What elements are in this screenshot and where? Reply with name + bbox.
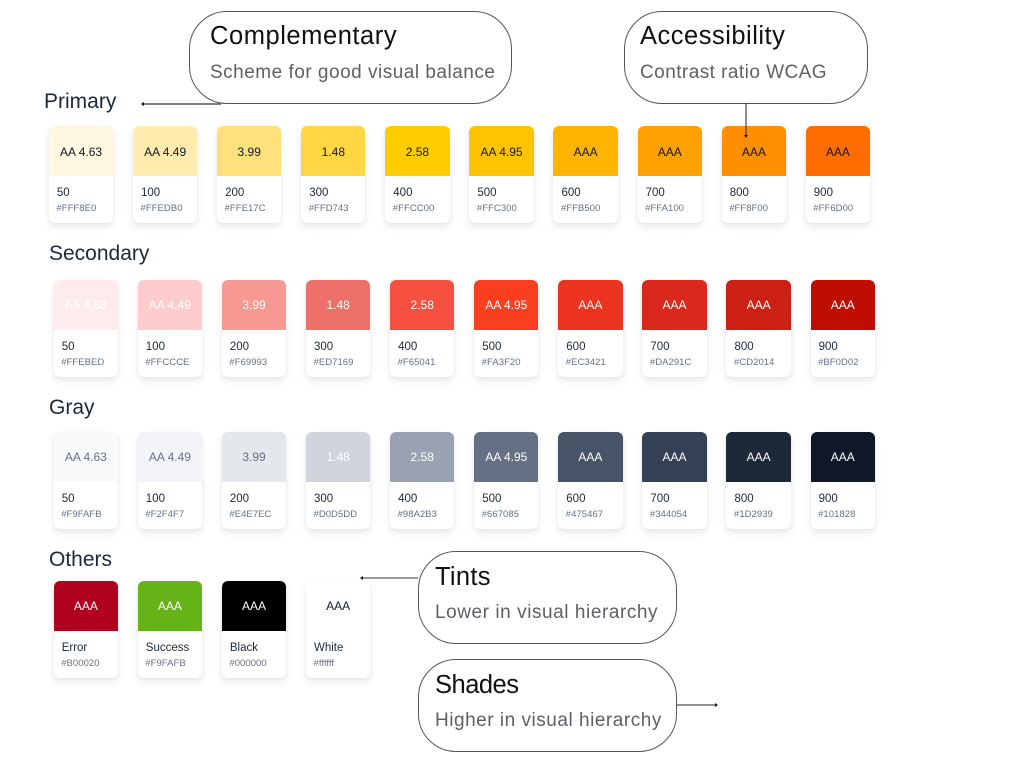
swatch: secondary 100: AA 4.49 bbox=[149, 298, 191, 312]
swatch: black: AAA bbox=[242, 599, 266, 613]
swatch: primary 700: #FFA100 bbox=[645, 203, 684, 214]
swatch: gray 400: 2.58 bbox=[411, 450, 434, 464]
heading: Others: Others bbox=[49, 548, 112, 571]
swatch: secondary 900: AAA bbox=[831, 298, 855, 312]
swatch: black: #000000 bbox=[229, 658, 267, 669]
swatch: primary 800: AAA bbox=[742, 145, 766, 159]
swatch: primary 400: 2.58 bbox=[406, 145, 429, 159]
swatch: white: #ffffff bbox=[313, 658, 334, 669]
swatch: secondary 800: AAA bbox=[747, 298, 771, 312]
swatch: white: White bbox=[314, 642, 343, 654]
callout: Tints bbox=[418, 551, 677, 644]
swatch: secondary 700 bbox=[642, 280, 707, 377]
swatch: secondary 300: 1.48 bbox=[326, 298, 350, 312]
swatch: secondary 400: #F65041 bbox=[398, 357, 435, 368]
callout: Complementary bbox=[189, 11, 512, 104]
swatch: secondary 200: 3.99 bbox=[242, 298, 266, 312]
swatch: secondary 800 bbox=[726, 280, 791, 377]
swatch: secondary 300: 300 bbox=[314, 341, 333, 353]
callout: Shades: Higher in visual hierarchy bbox=[435, 710, 662, 731]
swatch: secondary 400 bbox=[390, 280, 454, 377]
swatch: primary 600 bbox=[553, 126, 618, 223]
swatch: gray 200 bbox=[222, 432, 286, 529]
swatch: success bbox=[138, 581, 202, 678]
swatch: secondary 200: 200 bbox=[230, 341, 249, 353]
swatch: gray 200: #E4E7EC bbox=[229, 509, 271, 520]
swatch: gray 50: AA 4.63 bbox=[65, 450, 107, 464]
swatch: secondary 900: #BF0D02 bbox=[818, 357, 859, 368]
swatch: secondary 600: 600 bbox=[566, 341, 585, 353]
swatch: primary 700: AAA bbox=[658, 145, 682, 159]
swatch: primary 100 bbox=[133, 126, 197, 223]
callout: Complementary: Scheme for good visual balance bbox=[210, 62, 495, 83]
callout: Tints: Lower in visual hierarchy bbox=[435, 602, 658, 623]
swatch: secondary 50: AA 4.63 bbox=[65, 298, 107, 312]
swatch: gray 900: AAA bbox=[831, 450, 855, 464]
swatch: gray 300: 1.48 bbox=[326, 450, 350, 464]
swatch: gray 500: AA 4.95 bbox=[485, 450, 527, 464]
swatch: gray 800 bbox=[726, 432, 791, 529]
heading: Secondary: Secondary bbox=[49, 242, 149, 265]
swatch: gray 400 bbox=[390, 432, 454, 529]
swatch: primary 100: #FFEDB0 bbox=[140, 203, 183, 214]
swatch: primary 50: AA 4.63 bbox=[60, 145, 102, 159]
swatch: gray 400: #98A2B3 bbox=[398, 509, 437, 520]
swatch: secondary 500: 500 bbox=[482, 341, 501, 353]
panel: primary swatches bbox=[48, 126, 872, 228]
swatch: secondary 400: 400 bbox=[398, 341, 417, 353]
swatch: gray 50: #F9FAFB bbox=[61, 509, 102, 520]
swatch: gray 500: 500 bbox=[482, 493, 501, 505]
panel: other swatches bbox=[52, 581, 372, 683]
heading: Gray: Gray bbox=[49, 396, 95, 419]
swatch: gray 800: AAA bbox=[747, 450, 771, 464]
swatch: gray 800: #1D2939 bbox=[734, 509, 773, 520]
swatch: primary 200: 200 bbox=[225, 187, 244, 199]
swatch: primary 500: AA 4.95 bbox=[481, 145, 523, 159]
callout: Accessibility: Accessibility bbox=[640, 22, 785, 50]
swatch: gray 600: 600 bbox=[566, 493, 585, 505]
swatch: secondary 700: 700 bbox=[650, 341, 670, 353]
swatch: primary 300 bbox=[301, 126, 365, 223]
swatch: secondary 500: #FA3F20 bbox=[482, 357, 521, 368]
swatch: gray 700 bbox=[642, 432, 707, 529]
panel: gray swatches bbox=[52, 432, 876, 534]
swatch: gray 50 bbox=[54, 432, 118, 529]
callout: Shades: Shades bbox=[435, 671, 518, 699]
swatch: secondary 900 bbox=[811, 280, 875, 377]
swatch: primary 100: AA 4.49 bbox=[144, 145, 186, 159]
swatch: secondary 50: #FFEBED bbox=[61, 357, 104, 368]
swatch: gray 900: 900 bbox=[819, 493, 838, 505]
swatch: gray 900: #101828 bbox=[818, 509, 855, 520]
heading: Primary: Primary bbox=[44, 90, 116, 113]
callout: Shades bbox=[418, 659, 677, 752]
swatch: black: Black bbox=[230, 642, 258, 654]
callout: Complementary: Complementary bbox=[210, 22, 397, 50]
swatch: primary 900: #FF6D00 bbox=[813, 203, 853, 214]
swatch: white: AAA bbox=[326, 599, 350, 613]
swatch: gray 500 bbox=[474, 432, 538, 529]
swatch: white bbox=[306, 581, 370, 678]
arrow: Complementary to Primary bbox=[141, 102, 221, 106]
swatch: error bbox=[54, 581, 118, 678]
swatch: black bbox=[222, 581, 286, 678]
swatch: primary 300: 1.48 bbox=[322, 145, 345, 159]
swatch: secondary 500 bbox=[474, 280, 538, 377]
swatch: primary 900: AAA bbox=[826, 145, 850, 159]
swatch: gray 400: 400 bbox=[398, 493, 417, 505]
swatch: success: #F9FAFB bbox=[145, 658, 186, 669]
swatch: secondary 50: 50 bbox=[62, 341, 74, 353]
swatch: secondary 100: 100 bbox=[146, 341, 165, 353]
swatch: primary 400: #FFCC00 bbox=[393, 203, 434, 214]
swatch: success: Success bbox=[146, 642, 189, 654]
swatch: primary 200 bbox=[217, 126, 281, 223]
swatch: gray 200: 200 bbox=[230, 493, 249, 505]
swatch: secondary 300: #ED7169 bbox=[313, 357, 353, 368]
swatch: primary 300: #FFD743 bbox=[309, 203, 349, 214]
swatch: secondary 400: 2.58 bbox=[411, 298, 434, 312]
swatch: primary 500 bbox=[469, 126, 534, 223]
swatch: gray 600: #475467 bbox=[566, 509, 603, 520]
swatch: primary 300: 300 bbox=[309, 187, 328, 199]
swatch: secondary 800: #CD2014 bbox=[734, 357, 774, 368]
swatch: gray 100: AA 4.49 bbox=[149, 450, 191, 464]
swatch: primary 400: 400 bbox=[393, 187, 412, 199]
swatch: gray 100: #F2F4F7 bbox=[145, 509, 184, 520]
swatch: gray 100 bbox=[138, 432, 202, 529]
swatch: primary 800: 800 bbox=[730, 187, 749, 199]
swatch: primary 900: 900 bbox=[814, 187, 833, 199]
swatch: primary 500: #FFC300 bbox=[477, 203, 517, 214]
swatch: secondary 900: 900 bbox=[819, 341, 838, 353]
swatch: secondary 500: AA 4.95 bbox=[485, 298, 527, 312]
swatch: primary 700: 700 bbox=[646, 187, 665, 199]
swatch: primary 600: #FFB500 bbox=[561, 203, 600, 214]
swatch: error: AAA bbox=[74, 599, 98, 613]
swatch: primary 400 bbox=[385, 126, 450, 223]
swatch: primary 200: #FFE17C bbox=[225, 203, 266, 214]
swatch: primary 800 bbox=[722, 126, 786, 223]
swatch: gray 600: AAA bbox=[578, 450, 602, 464]
swatch: secondary 200: #F69993 bbox=[229, 357, 267, 368]
callout: Tints: Tints bbox=[435, 563, 491, 591]
panel: secondary swatches bbox=[52, 280, 876, 382]
swatch: secondary 100: #FFCCCE bbox=[145, 357, 189, 368]
swatch: gray 300 bbox=[306, 432, 370, 529]
swatch: success: AAA bbox=[158, 599, 182, 613]
swatch: secondary 600: #EC3421 bbox=[566, 357, 606, 368]
swatch: secondary 700: #DA291C bbox=[650, 357, 691, 368]
swatch: primary 900 bbox=[806, 126, 870, 223]
swatch: primary 200: 3.99 bbox=[238, 145, 261, 159]
callout: Accessibility: Contrast ratio WCAG bbox=[640, 62, 827, 83]
swatch: error: #B00020 bbox=[61, 658, 100, 669]
swatch: secondary 100 bbox=[138, 280, 202, 377]
swatch: primary 700 bbox=[638, 126, 702, 223]
swatch: primary 500: 500 bbox=[477, 187, 497, 199]
swatch: gray 600 bbox=[558, 432, 623, 529]
swatch: primary 50 bbox=[49, 126, 113, 223]
arrow: Accessibility to swatch 800 bbox=[744, 103, 748, 138]
swatch: gray 900 bbox=[811, 432, 875, 529]
swatch: gray 700: 700 bbox=[650, 493, 670, 505]
swatch: gray 700: #344054 bbox=[650, 509, 687, 520]
swatch: secondary 300 bbox=[306, 280, 370, 377]
swatch: secondary 50 bbox=[54, 280, 118, 377]
swatch: primary 100: 100 bbox=[141, 187, 160, 199]
swatch: secondary 800: 800 bbox=[734, 341, 754, 353]
swatch: primary 600: 600 bbox=[561, 187, 581, 199]
swatch: secondary 600 bbox=[558, 280, 623, 377]
swatch: gray 300: 300 bbox=[314, 493, 333, 505]
callout: Accessibility bbox=[624, 11, 868, 104]
swatch: secondary 600: AAA bbox=[578, 298, 602, 312]
swatch: gray 50: 50 bbox=[62, 493, 74, 505]
swatch: primary 50: #FFF8E0 bbox=[56, 203, 96, 214]
swatch: gray 500: #667085 bbox=[482, 509, 519, 520]
swatch: gray 200: 3.99 bbox=[242, 450, 266, 464]
swatch: error: Error bbox=[62, 642, 87, 654]
swatch: gray 300: #D0D5DD bbox=[313, 509, 357, 520]
swatch: gray 800: 800 bbox=[734, 493, 754, 505]
swatch: primary 800: #FF8F00 bbox=[729, 203, 768, 214]
swatch: primary 600: AAA bbox=[574, 145, 598, 159]
arrow: Shades outward bbox=[677, 703, 718, 707]
swatch: secondary 200 bbox=[222, 280, 286, 377]
swatch: secondary 700: AAA bbox=[663, 298, 687, 312]
swatch: gray 700: AAA bbox=[663, 450, 687, 464]
swatch: primary 50: 50 bbox=[57, 187, 70, 199]
swatch: gray 100: 100 bbox=[146, 493, 165, 505]
arrow: Tints to White swatch bbox=[360, 576, 418, 580]
